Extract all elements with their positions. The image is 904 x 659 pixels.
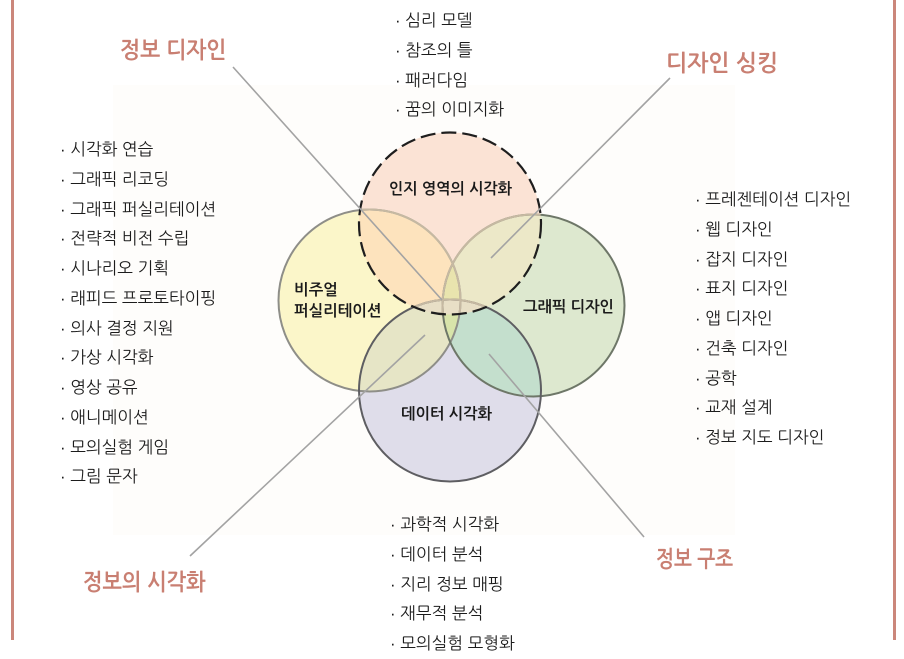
list: visual facilitation: · 가상 시각화 [60, 348, 153, 367]
heading: design thinking: 디자인 싱킹 [666, 53, 778, 75]
list: graphic design [695, 190, 851, 447]
list: graphic design: · 표지 디자인 [695, 279, 788, 298]
list: cognitive visualization: · 패러다임 [395, 70, 468, 90]
heading: information visualization: 정보의 시각화 [83, 572, 206, 594]
list: graphic design: · 교재 설계 [695, 398, 773, 417]
line: information architecture [489, 354, 644, 537]
list: graphic design: · 프레젠테이션 디자인 [695, 190, 851, 209]
list: data visualization [390, 515, 515, 653]
circle: visual facilitation [278, 210, 460, 392]
list: visual facilitation: · 그래픽 리코딩 [60, 170, 169, 189]
list: visual facilitation: · 의사 결정 지원 [60, 318, 174, 338]
list: visual facilitation: · 모의실험 게임 [60, 438, 169, 456]
list: visual facilitation: · 전략적 비전 수립 [60, 229, 189, 248]
overlap: graphic design and data [452, 308, 540, 396]
list: visual facilitation [60, 140, 216, 486]
outline: data visualization [359, 300, 541, 482]
label: graphic design: 그래픽 디자인 [523, 298, 614, 315]
list: graphic design: · 웹 디자인 [695, 220, 773, 239]
list: visual facilitation: · 영상 공유 [60, 378, 138, 397]
label: visual facilitation: 퍼실리테이션 [294, 302, 381, 319]
list: graphic design: · 공학 [695, 368, 737, 388]
list: visual facilitation: · 그림 문자 [60, 467, 138, 486]
list: cognitive visualization: · 심리 모델 [395, 11, 473, 30]
left border [11, 0, 14, 640]
overlap: visual facilitation and graphic design [444, 314, 458, 340]
heading: information architecture: 정보 구조 [656, 549, 733, 571]
list: data visualization: · 지리 정보 매핑 [390, 574, 504, 594]
outline: visual facilitation [278, 210, 460, 392]
list: graphic design: · 잡지 디자인 [695, 250, 788, 268]
dashed outline: cognitive visualization [359, 132, 541, 314]
list: data visualization: · 과학적 시각화 [390, 515, 499, 534]
label: cognitive visualization: 인지 영역의 시각화 [389, 180, 512, 197]
circle: cognitive visualization [359, 132, 541, 314]
list: graphic design: · 건축 디자인 [695, 339, 788, 358]
overlap: centre upper lens [444, 266, 460, 299]
list: visual facilitation: · 래피드 프로토타이핑 [60, 289, 216, 308]
line: design thinking [491, 78, 670, 258]
background panel [113, 85, 735, 535]
line: information design [233, 67, 442, 300]
faded outlines inside cognitive circle [362, 208, 541, 313]
list: data visualization: · 재무적 분석 [390, 604, 483, 623]
overlap: cognitive and graphic design [454, 216, 540, 306]
list: visual facilitation: · 그래픽 퍼실리테이션 [60, 200, 216, 218]
list: visual facilitation: · 애니메이션 [60, 408, 149, 427]
list: data visualization: · 모의실험 모형화 [390, 634, 515, 653]
outline: graphic design [442, 214, 624, 396]
right border [893, 0, 896, 640]
circle: data visualization [359, 300, 541, 482]
list: data visualization: · 데이터 분석 [390, 545, 483, 564]
heading: information design: 정보 디자인 [120, 40, 227, 62]
list: cognitive visualization [395, 11, 504, 119]
list: graphic design: · 앱 디자인 [695, 309, 773, 328]
list: graphic design: · 정보 지도 디자인 [695, 428, 824, 447]
list: visual facilitation: · 시나리오 기획 [60, 259, 169, 278]
overlap: cognitive and data lens [444, 300, 483, 314]
line: information visualization [190, 335, 425, 556]
list: visual facilitation: · 시각화 연습 [60, 140, 153, 159]
label: data visualization: 데이터 시각화 [401, 405, 492, 422]
list: cognitive visualization: · 꿈의 이미지화 [395, 100, 504, 119]
venn diagram [190, 66, 670, 556]
overlap: visual facilitation and data [360, 308, 449, 390]
list: cognitive visualization: · 참조의 틀 [395, 41, 473, 60]
label: visual facilitation: 비주얼 [294, 281, 338, 298]
circle: graphic design [442, 214, 624, 396]
overlap: visual facilitation and cognitive [359, 210, 452, 306]
